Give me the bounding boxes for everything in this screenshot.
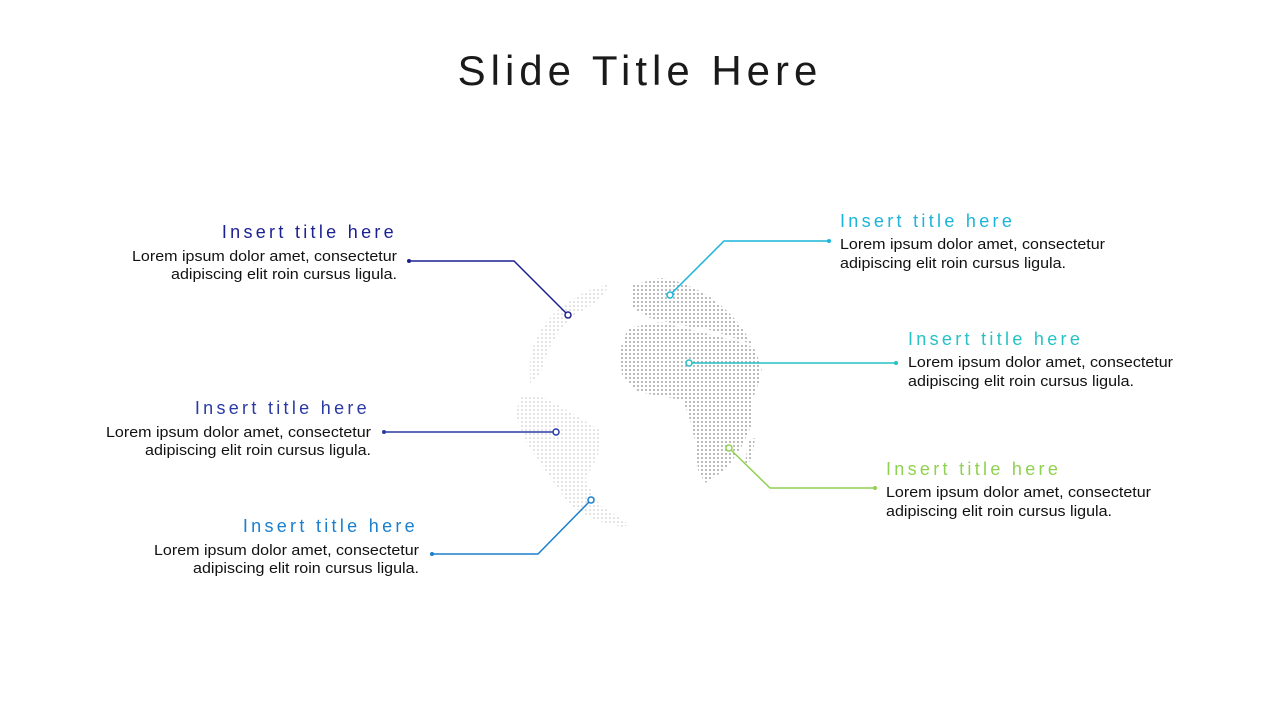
callout 5: right middle: Insert title here xyxy=(908,329,1083,349)
globe xyxy=(514,276,768,530)
callout 4: right top xyxy=(667,211,1105,298)
callout 2: left middle: adipiscing elit roin cursus ligula. xyxy=(145,443,371,459)
callout 3: left bottom: Insert title here xyxy=(243,516,418,536)
callout 1: left top: Lorem ipsum dolor amet, consectetur xyxy=(132,249,397,265)
callout 1: left top xyxy=(132,222,571,318)
callout 3: left bottom: Lorem ipsum dolor amet, consectetur xyxy=(154,543,419,559)
continent: south america xyxy=(516,395,630,530)
callout 1: left top: adipiscing elit roin cursus ligula. xyxy=(171,267,397,283)
callout 6: right bottom: Insert title here xyxy=(886,459,1061,479)
continent: madagascar xyxy=(745,438,755,465)
callout 4: right top: adipiscing elit roin cursus ligula. xyxy=(840,256,1066,272)
continent: north america xyxy=(530,284,610,385)
callout 3: left bottom xyxy=(154,497,594,577)
callout 6: right bottom: adipiscing elit roin cursus ligula. xyxy=(886,504,1112,520)
continent: africa xyxy=(620,322,765,483)
callout 2: left middle xyxy=(106,398,559,459)
callout 6: right bottom xyxy=(726,445,1151,520)
callout 5: right middle: Lorem ipsum dolor amet, consectetur xyxy=(908,355,1173,371)
callout 4: right top: Insert title here xyxy=(840,211,1015,231)
callout 2: left middle: Insert title here xyxy=(195,398,370,418)
callout 4: right top: Lorem ipsum dolor amet, consectetur xyxy=(840,237,1105,253)
callout 5: right middle: adipiscing elit roin cursus ligula. xyxy=(908,374,1134,390)
title: Slide Title Here xyxy=(458,47,822,94)
callout 5: right middle xyxy=(686,329,1173,390)
callout 6: right bottom: Lorem ipsum dolor amet, consectetur xyxy=(886,485,1151,501)
callout 3: left bottom: adipiscing elit roin cursus ligula. xyxy=(193,561,419,577)
continent: europe xyxy=(633,278,751,343)
callout 1: left top: Insert title here xyxy=(222,222,397,242)
callout 2: left middle: Lorem ipsum dolor amet, consectetur xyxy=(106,425,371,441)
